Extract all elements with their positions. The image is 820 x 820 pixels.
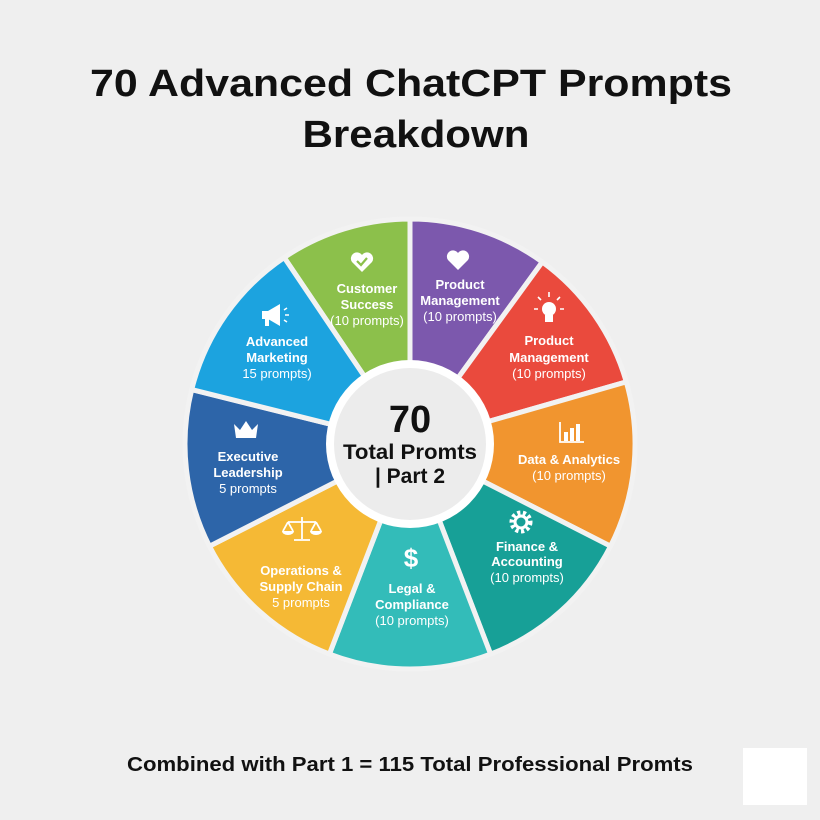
white square <box>743 748 807 805</box>
center circle <box>326 360 494 528</box>
segment: legal <box>329 444 491 669</box>
center circle: | Part 2 <box>375 465 445 488</box>
label: data analytics: (10 prompts) <box>532 468 606 483</box>
label: executive: Leadership <box>213 465 283 480</box>
segment: customer success <box>284 219 410 444</box>
segment: finance <box>410 444 610 654</box>
label: product management purple <box>420 250 500 324</box>
label: marketing: Marketing <box>246 350 308 365</box>
label: customer success <box>330 252 404 328</box>
segment: data analytics <box>410 382 635 546</box>
label: finance: (10 prompts) <box>490 570 564 585</box>
label: product management red: Product <box>524 333 574 348</box>
label: product management purple: Management <box>420 293 500 308</box>
label: legal: Legal & <box>389 581 435 596</box>
center circle: 70 <box>389 399 431 441</box>
label: finance: Finance & <box>496 539 558 554</box>
segment: marketing <box>192 258 410 444</box>
label: data analytics: Data & Analytics <box>518 452 620 467</box>
label: executive <box>213 421 283 496</box>
label: customer success: Success <box>341 297 393 312</box>
segment: executive <box>185 390 410 546</box>
title: Breakdown <box>302 114 530 156</box>
label: product management red <box>509 292 589 381</box>
label: product management red: (10 prompts) <box>512 366 586 381</box>
label: customer success: (10 prompts) <box>330 313 404 328</box>
title: 70 Advanced ChatCPT Prompts <box>90 63 732 105</box>
center circle: Total Promts <box>343 441 477 464</box>
label: legal <box>375 543 449 628</box>
label: marketing: 15 prompts) <box>242 366 312 381</box>
title <box>90 63 732 156</box>
label: marketing: Advanced <box>246 334 308 349</box>
label: product management purple: (10 prompts) <box>423 309 497 324</box>
footer text: Combined with Part 1 = 115 Total Professional Promts <box>127 754 693 776</box>
donut chart <box>185 219 635 669</box>
label: operations: Operations & <box>260 563 342 578</box>
label: operations: Supply Chain <box>259 579 343 594</box>
label: legal: $ <box>404 543 419 573</box>
label: operations: 5 prompts <box>272 595 330 610</box>
label: marketing <box>242 304 312 381</box>
label: product management purple: Product <box>435 277 485 292</box>
segment: product management red <box>410 262 626 444</box>
label: operations <box>259 517 343 610</box>
label: legal: Compliance <box>375 597 449 612</box>
label: executive: Executive <box>218 449 278 464</box>
label: finance: Accounting <box>491 554 563 569</box>
segment: operations <box>210 444 410 654</box>
labels <box>213 250 620 628</box>
segment: product management purple <box>410 219 542 444</box>
label: customer success: Customer <box>337 281 397 296</box>
label: data analytics <box>518 422 620 483</box>
label: executive: 5 prompts <box>219 481 277 496</box>
label: finance <box>490 513 564 585</box>
label: legal: (10 prompts) <box>375 613 449 628</box>
label: product management red: Management <box>509 350 589 365</box>
